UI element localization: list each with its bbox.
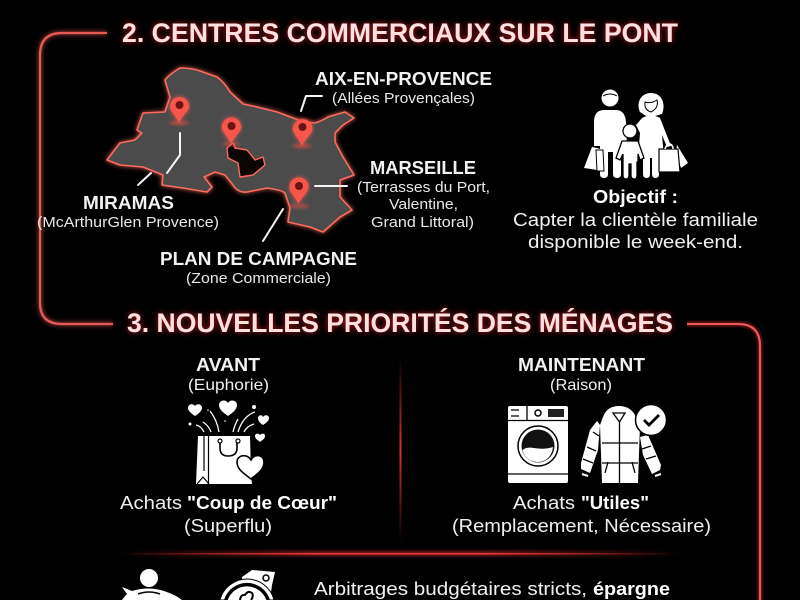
label: Miramas	[37, 192, 219, 231]
pin: Miramas	[169, 97, 189, 125]
pin: centre	[222, 118, 241, 146]
title: maintenant	[518, 354, 646, 394]
text: objectif: disponible le week-end.	[528, 231, 743, 252]
text: coup de coeur: (Superflu)	[184, 515, 272, 536]
title: avant	[188, 354, 269, 394]
label: Aix-en-Provence: (Allées Provençales)	[332, 91, 475, 107]
label: Aix-en-Provence	[315, 68, 492, 107]
icon: shopping bag with hearts	[188, 401, 269, 484]
map panel	[107, 68, 354, 241]
callout lines	[138, 96, 347, 241]
pin: Aix-en-Provence	[292, 119, 312, 148]
label: Miramas: (McArthurGlen Provence)	[37, 215, 219, 231]
text: utiles: (Remplacement, Nécessaire)	[452, 515, 711, 536]
child	[616, 124, 644, 179]
label: Marseille	[357, 157, 490, 231]
column: maintenant	[452, 354, 711, 536]
text: objectif	[513, 186, 758, 252]
text: coup de coeur	[120, 492, 337, 536]
text: utiles: "Utiles"	[581, 492, 649, 513]
icon: puffer jacket with check	[581, 404, 666, 483]
column: avant	[120, 354, 337, 536]
text: arbitrages: Arbitrages budgétaires stricts,	[314, 578, 587, 599]
text: coup de coeur: Achats	[120, 492, 182, 513]
label: Marseille: MARSEILLE	[370, 157, 476, 178]
map: Étang de Berre	[227, 143, 265, 177]
text: coup de coeur: "Coup de Cœur"	[187, 492, 337, 513]
label: Marseille: Valentine,	[389, 197, 458, 213]
icon: piggy bank with coin	[122, 569, 182, 600]
text: objectif: Capter la clientèle familiale	[513, 209, 758, 230]
icon: family with shopping bags	[584, 90, 688, 179]
pin: Marseille	[289, 178, 309, 208]
frame line: section 3	[687, 324, 760, 600]
woman	[636, 93, 671, 178]
label: Plan de Campagne: (Zone Commerciale)	[186, 271, 331, 287]
heading: section 3: 3. NOUVELLES PRIORITÉS DES MÉNAGES	[127, 308, 673, 338]
title: avant: AVANT	[196, 354, 261, 375]
text: arbitrages	[314, 578, 670, 599]
icon: washing machine	[508, 406, 568, 483]
title: maintenant: (Raison)	[550, 377, 612, 394]
map: Bouches-du-Rhône outline	[107, 68, 354, 232]
text: arbitrages: épargne	[593, 578, 670, 599]
bags	[584, 144, 688, 172]
label: Plan de Campagne	[160, 248, 357, 287]
label: Marseille: Grand Littoral)	[371, 215, 474, 231]
text: utiles: Achats	[513, 492, 575, 513]
title: maintenant: MAINTENANT	[518, 354, 646, 375]
label: Marseille: (Terrasses du Port,	[357, 180, 490, 196]
label: Aix-en-Provence: AIX-EN-PROVENCE	[315, 68, 492, 89]
column divider	[400, 358, 402, 542]
frame line: section 2	[40, 33, 113, 324]
title: avant: (Euphorie)	[188, 377, 269, 394]
man	[594, 90, 627, 178]
text: utiles	[452, 492, 711, 536]
label: Plan de Campagne: PLAN DE CAMPAGNE	[160, 248, 357, 269]
text: objectif: Objectif :	[593, 186, 678, 207]
heading: section 2: 2. CENTRES COMMERCIAUX SUR LE PONT	[122, 18, 678, 48]
horizontal divider	[120, 551, 680, 556]
icon: price tag with coin	[220, 570, 275, 600]
label: Miramas: MIRAMAS	[83, 192, 174, 213]
